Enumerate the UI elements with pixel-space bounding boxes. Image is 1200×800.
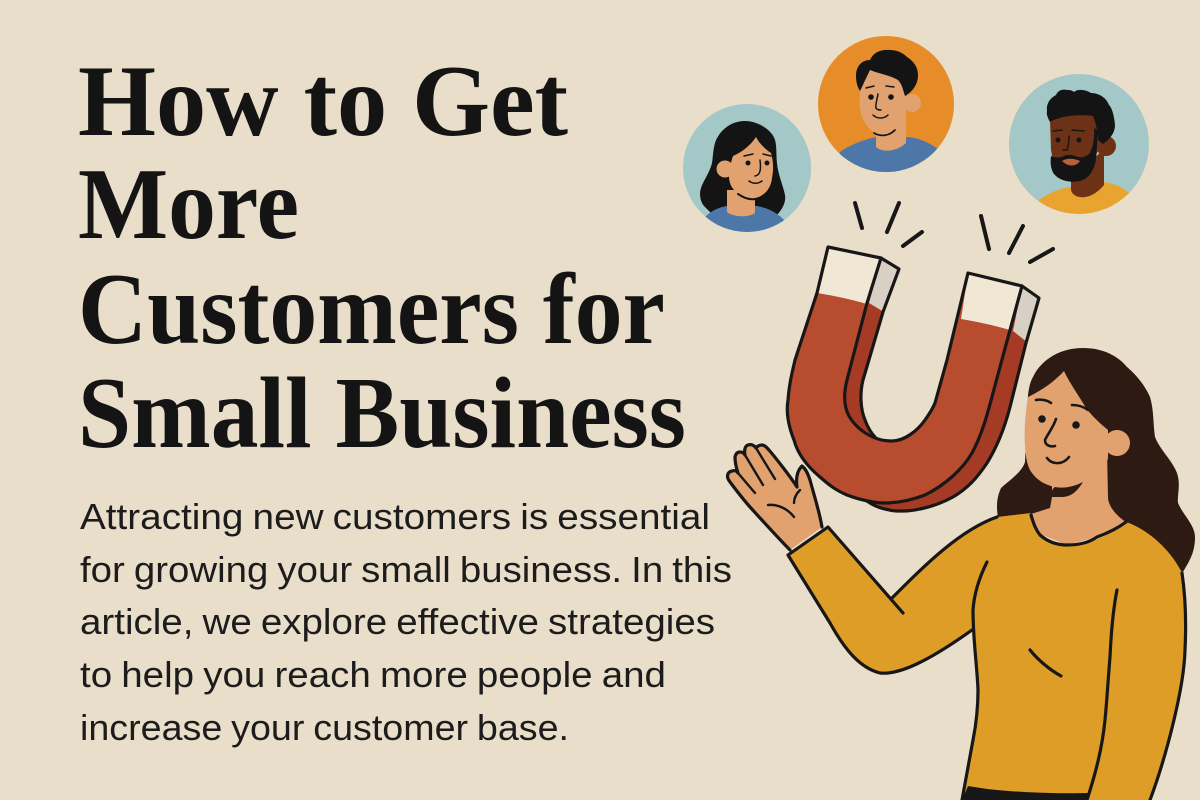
intro paragraph: article, we explore effective strategies xyxy=(80,601,715,642)
intro paragraph: to help you reach more people and xyxy=(80,654,666,695)
magnet inner side face xyxy=(845,258,899,437)
sweater xyxy=(788,513,1186,800)
title: How to Get xyxy=(78,45,568,158)
hair xyxy=(997,348,1195,572)
neck xyxy=(1031,450,1126,545)
face features xyxy=(1036,400,1088,463)
chin shadow xyxy=(1052,482,1083,497)
avatar: bearded man on teal circle xyxy=(1009,74,1149,225)
magnet front face xyxy=(787,247,1022,503)
intro paragraph: Attracting new customers is essential xyxy=(80,496,710,537)
magnet outer side face xyxy=(867,286,1039,511)
hand xyxy=(728,445,822,550)
avatar: man on orange circle xyxy=(818,36,954,175)
sweater outlines xyxy=(788,517,997,673)
magnet outlines xyxy=(787,247,1022,503)
intro paragraph xyxy=(80,496,732,748)
magnet right pole side xyxy=(1013,286,1039,342)
horseshoe magnet xyxy=(787,247,1039,511)
title xyxy=(78,45,686,470)
magnet left pole side xyxy=(869,258,899,312)
trousers xyxy=(962,786,1088,800)
ear xyxy=(1104,430,1130,456)
woman holding magnet xyxy=(728,348,1195,800)
magnet sparks left xyxy=(855,203,922,246)
face xyxy=(1025,371,1108,487)
magnet right pole tip xyxy=(961,273,1022,330)
title: Customers for xyxy=(78,253,665,366)
magnet left pole tip xyxy=(817,247,881,304)
intro paragraph: increase your customer base. xyxy=(80,707,569,748)
avatar: woman on teal circle xyxy=(683,104,811,240)
title: Small Business xyxy=(78,357,686,470)
magnet sparks right xyxy=(981,216,1053,262)
title: More xyxy=(78,148,299,261)
intro paragraph: for growing your small business. In this xyxy=(80,549,732,590)
